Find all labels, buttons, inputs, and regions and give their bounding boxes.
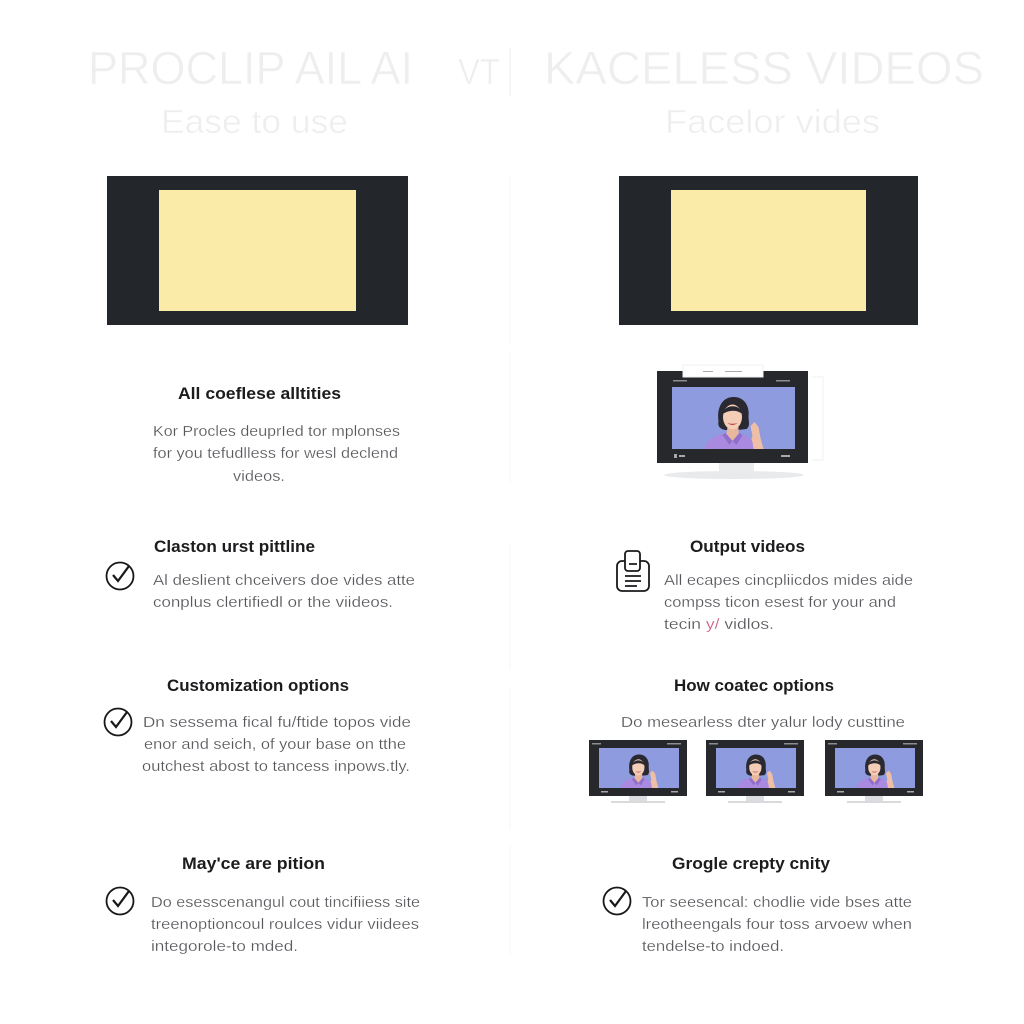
text block: for you tefudlless for wesl declend xyxy=(153,446,398,462)
icon: large monitor with presenter xyxy=(657,365,823,479)
title: VT xyxy=(458,51,500,92)
icon: three monitors xyxy=(589,740,923,803)
video placeholder: right xyxy=(619,176,918,325)
text block: Tor seesencal: chodlie vide bses atte xyxy=(642,895,912,911)
subtitle: left: Ease to use xyxy=(161,103,348,140)
icon: check xyxy=(106,888,134,914)
subtitle: right: Facelor vides xyxy=(665,103,880,140)
text block: Kor Procles deuprIed tor mplonses xyxy=(153,424,400,440)
text block: integorole-to mded. xyxy=(151,939,298,955)
text block xyxy=(151,895,420,955)
text block xyxy=(642,895,912,955)
text block: treenoptioncoul roulces vidur viidees xyxy=(151,917,419,933)
text block: lreotheengals four toss arvoew when xyxy=(642,917,912,933)
panel: output videos xyxy=(617,538,913,633)
icon: check xyxy=(604,888,630,914)
heading: Grogle crepty cnity xyxy=(672,855,831,873)
text block: videos. xyxy=(233,469,285,485)
heading: May'ce are pition xyxy=(182,855,325,873)
title: PROCLIP AIL AI xyxy=(88,42,413,94)
text block: tendelse-to indoed. xyxy=(642,939,784,955)
text block: compss ticon esest for your and xyxy=(664,595,896,611)
heading: Customization options xyxy=(167,677,349,695)
heading: Output videos xyxy=(690,538,805,556)
text block: Dn sessema fical fu/ftide topos vide xyxy=(143,715,411,731)
text block: outchest abost to tancess inpows.tly. xyxy=(142,759,410,775)
text block xyxy=(153,573,415,611)
text block: tecin y/ vidlos. xyxy=(664,617,774,633)
text block: Do esesscenangul cout tincifiiess site xyxy=(151,895,420,911)
text block: enor and seich, of your base on tthe xyxy=(144,737,406,753)
heading: All coeflese alltities xyxy=(178,385,341,403)
panel: customization options xyxy=(104,677,411,775)
text block: conplus clertifiedl or the viidеos. xyxy=(153,595,393,611)
icon: check xyxy=(104,708,132,736)
title: KACELESS VIDEOS xyxy=(544,42,984,94)
heading: How coatec options xyxy=(674,677,834,695)
video placeholder: left xyxy=(107,176,408,325)
panel: position xyxy=(106,855,420,955)
panel: custom pipeline xyxy=(106,538,415,611)
panel: how options xyxy=(589,677,923,803)
panel: AI abilities xyxy=(153,385,400,485)
panel: google xyxy=(604,855,912,955)
text block: All ecapes cincpliicdos mides aide xyxy=(664,573,913,589)
icon: document xyxy=(617,551,649,591)
text block xyxy=(664,573,913,633)
text block xyxy=(142,715,411,775)
text block: Al deslient chceivers doe vides atte xyxy=(153,573,415,589)
text block: Do mesearless dter yalur lody custtine xyxy=(621,715,905,731)
heading: Claston urst pittline xyxy=(154,538,315,556)
text block xyxy=(153,424,400,485)
title xyxy=(88,42,984,94)
icon: check xyxy=(106,562,134,590)
